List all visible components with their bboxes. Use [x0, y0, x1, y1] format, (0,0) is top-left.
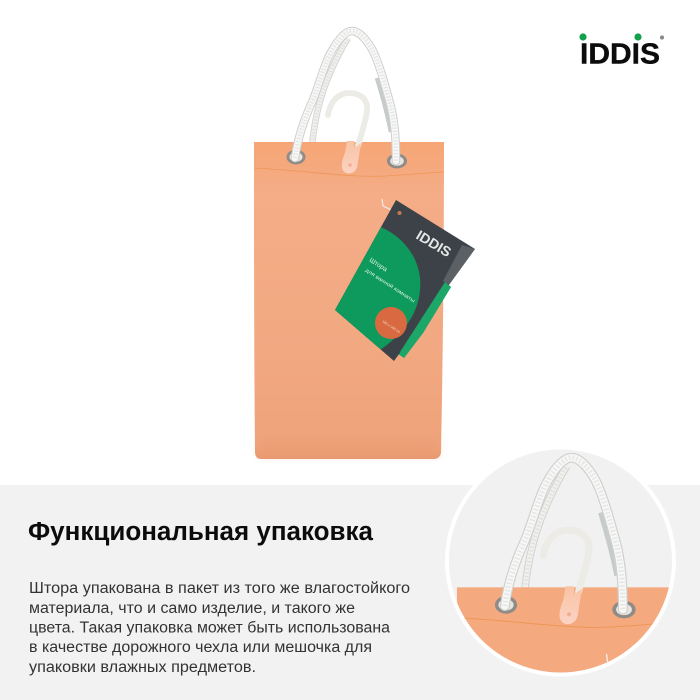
green strip on tag — [398, 282, 451, 358]
detail circle: close-up of handles — [445, 450, 676, 676]
logo: IDDIS: IDDIS — [580, 38, 660, 70]
handles, hook, eyelets and stitch — [254, 31, 444, 176]
body text: в качестве дорожного чехла или мешочка для — [29, 639, 372, 656]
body text: цвета. Такая упаковка может быть использована — [29, 620, 390, 636]
grey strip on tag — [443, 245, 475, 286]
tag subtitle: для ванной комнаты — [364, 267, 417, 305]
body text: упаковки влажных предметов. — [29, 659, 256, 676]
green area of card — [330, 226, 420, 350]
heading: Функциональная упаковка — [28, 518, 374, 546]
product: orange bag with rope handles and hook — [254, 31, 444, 459]
tag string — [382, 199, 398, 213]
body text — [29, 580, 410, 676]
bag body — [254, 142, 444, 459]
body text: Штора упакована в пакет из того же влагостойкого — [29, 580, 410, 597]
green strip front — [400, 282, 451, 358]
orange circle on card — [375, 307, 407, 339]
tag hole — [398, 211, 402, 215]
bottom grey band — [0, 485, 700, 700]
hang tag card — [330, 200, 475, 361]
tag title: Штора — [368, 257, 389, 274]
tag logo: IDDIS — [413, 227, 454, 260]
soft fold shading — [262, 440, 436, 456]
card base — [335, 200, 475, 361]
tag size text: 180 x 180 см — [381, 319, 401, 334]
body text: материала, что и само изделие, и такого же — [29, 600, 355, 617]
